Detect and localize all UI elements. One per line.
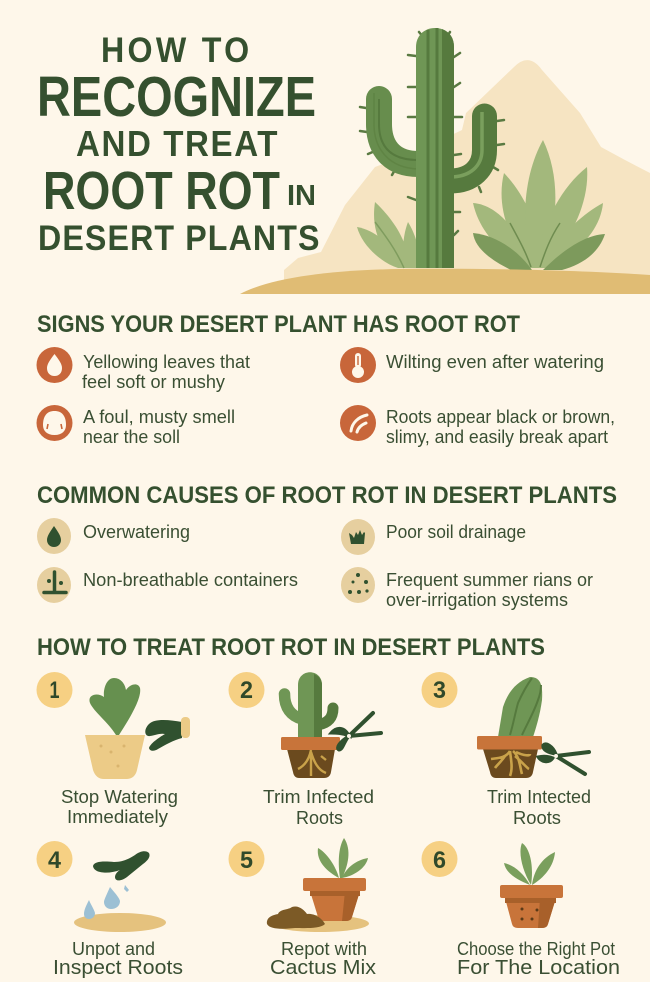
step 4: Unpot and — [72, 938, 155, 959]
sign: foul smell: A foul, musty smell — [83, 406, 235, 427]
step 3: Roots — [513, 807, 561, 828]
step 4: Inspect Roots — [53, 957, 183, 979]
title: RECOGNIZE — [37, 65, 316, 129]
title: IN — [287, 180, 316, 212]
sign: wilting: Wilting even after watering — [386, 351, 604, 372]
step 5: Repot with — [281, 938, 367, 959]
mountain — [284, 60, 650, 280]
panel: causes — [37, 482, 617, 610]
step 6: Choose the Right Pot — [457, 938, 615, 959]
cactus — [360, 28, 504, 268]
title: HOW TO — [101, 32, 249, 70]
step 2 — [228, 672, 381, 828]
cause: poor drainage: Poor soil drainage — [386, 521, 526, 542]
step 6: For The Location — [457, 957, 620, 979]
sign: yellowing leaves: Yellowing leaves that — [83, 351, 250, 372]
cause: rain: over-irrigation systems — [386, 589, 568, 610]
sign: black roots — [340, 405, 615, 447]
step 2: Trim Infected — [263, 786, 374, 807]
step 1: 1 — [50, 677, 60, 704]
title: DESERT PLANTS — [38, 220, 320, 258]
desert illustration — [240, 28, 650, 294]
sign: yellowing leaves: feel soft or mushy — [82, 371, 226, 392]
right agave — [473, 140, 605, 270]
step 6 — [422, 841, 620, 979]
title: ROOT ROT — [43, 161, 280, 221]
step 4 — [36, 841, 183, 979]
step 1 — [36, 672, 190, 827]
causes heading: COMMON CAUSES OF ROOT ROT IN DESERT PLANTS — [37, 482, 617, 509]
sign: yellowing leaves — [36, 347, 250, 392]
step 3 — [422, 672, 591, 828]
panel: signs — [36, 311, 615, 447]
signs heading: SIGNS YOUR DESERT PLANT HAS ROOT ROT — [37, 311, 520, 338]
step 2: Roots — [296, 807, 343, 828]
step 5: 5 — [240, 847, 253, 874]
cause: containers — [37, 567, 298, 603]
cause: rain: Frequent summer rians or — [386, 569, 593, 590]
sign: wilting — [340, 347, 604, 383]
cause: overwatering: Overwatering — [83, 521, 190, 542]
title: AND TREAT — [76, 125, 277, 164]
title — [37, 32, 320, 258]
left agave — [357, 202, 420, 268]
step 6: 6 — [433, 847, 446, 874]
step 4: 4 — [48, 847, 62, 874]
sand dune — [240, 269, 650, 294]
cause: containers: Non-breathable containers — [83, 569, 298, 590]
step 1: Stop Watering — [61, 786, 178, 807]
step 5: Cactus Mix — [270, 957, 376, 979]
cause: poor drainage — [341, 519, 526, 555]
sign: black roots: slimy, and easily break apart — [386, 426, 608, 447]
step 3: Trim Intected — [487, 786, 591, 807]
panel: treatment — [36, 634, 620, 979]
step 3: 3 — [433, 677, 446, 704]
sign: black roots: Roots appear black or brown, — [386, 406, 615, 427]
sign: foul smell — [36, 405, 235, 447]
sign: foul smell: near the soll — [83, 426, 180, 447]
cause: rain — [341, 567, 593, 610]
step 2: 2 — [240, 677, 253, 704]
step 1: Immediately — [67, 806, 169, 827]
treatment heading: HOW TO TREAT ROOT ROT IN DESERT PLANTS — [37, 634, 545, 661]
cause: overwatering — [37, 518, 190, 554]
step 5 — [228, 838, 376, 979]
